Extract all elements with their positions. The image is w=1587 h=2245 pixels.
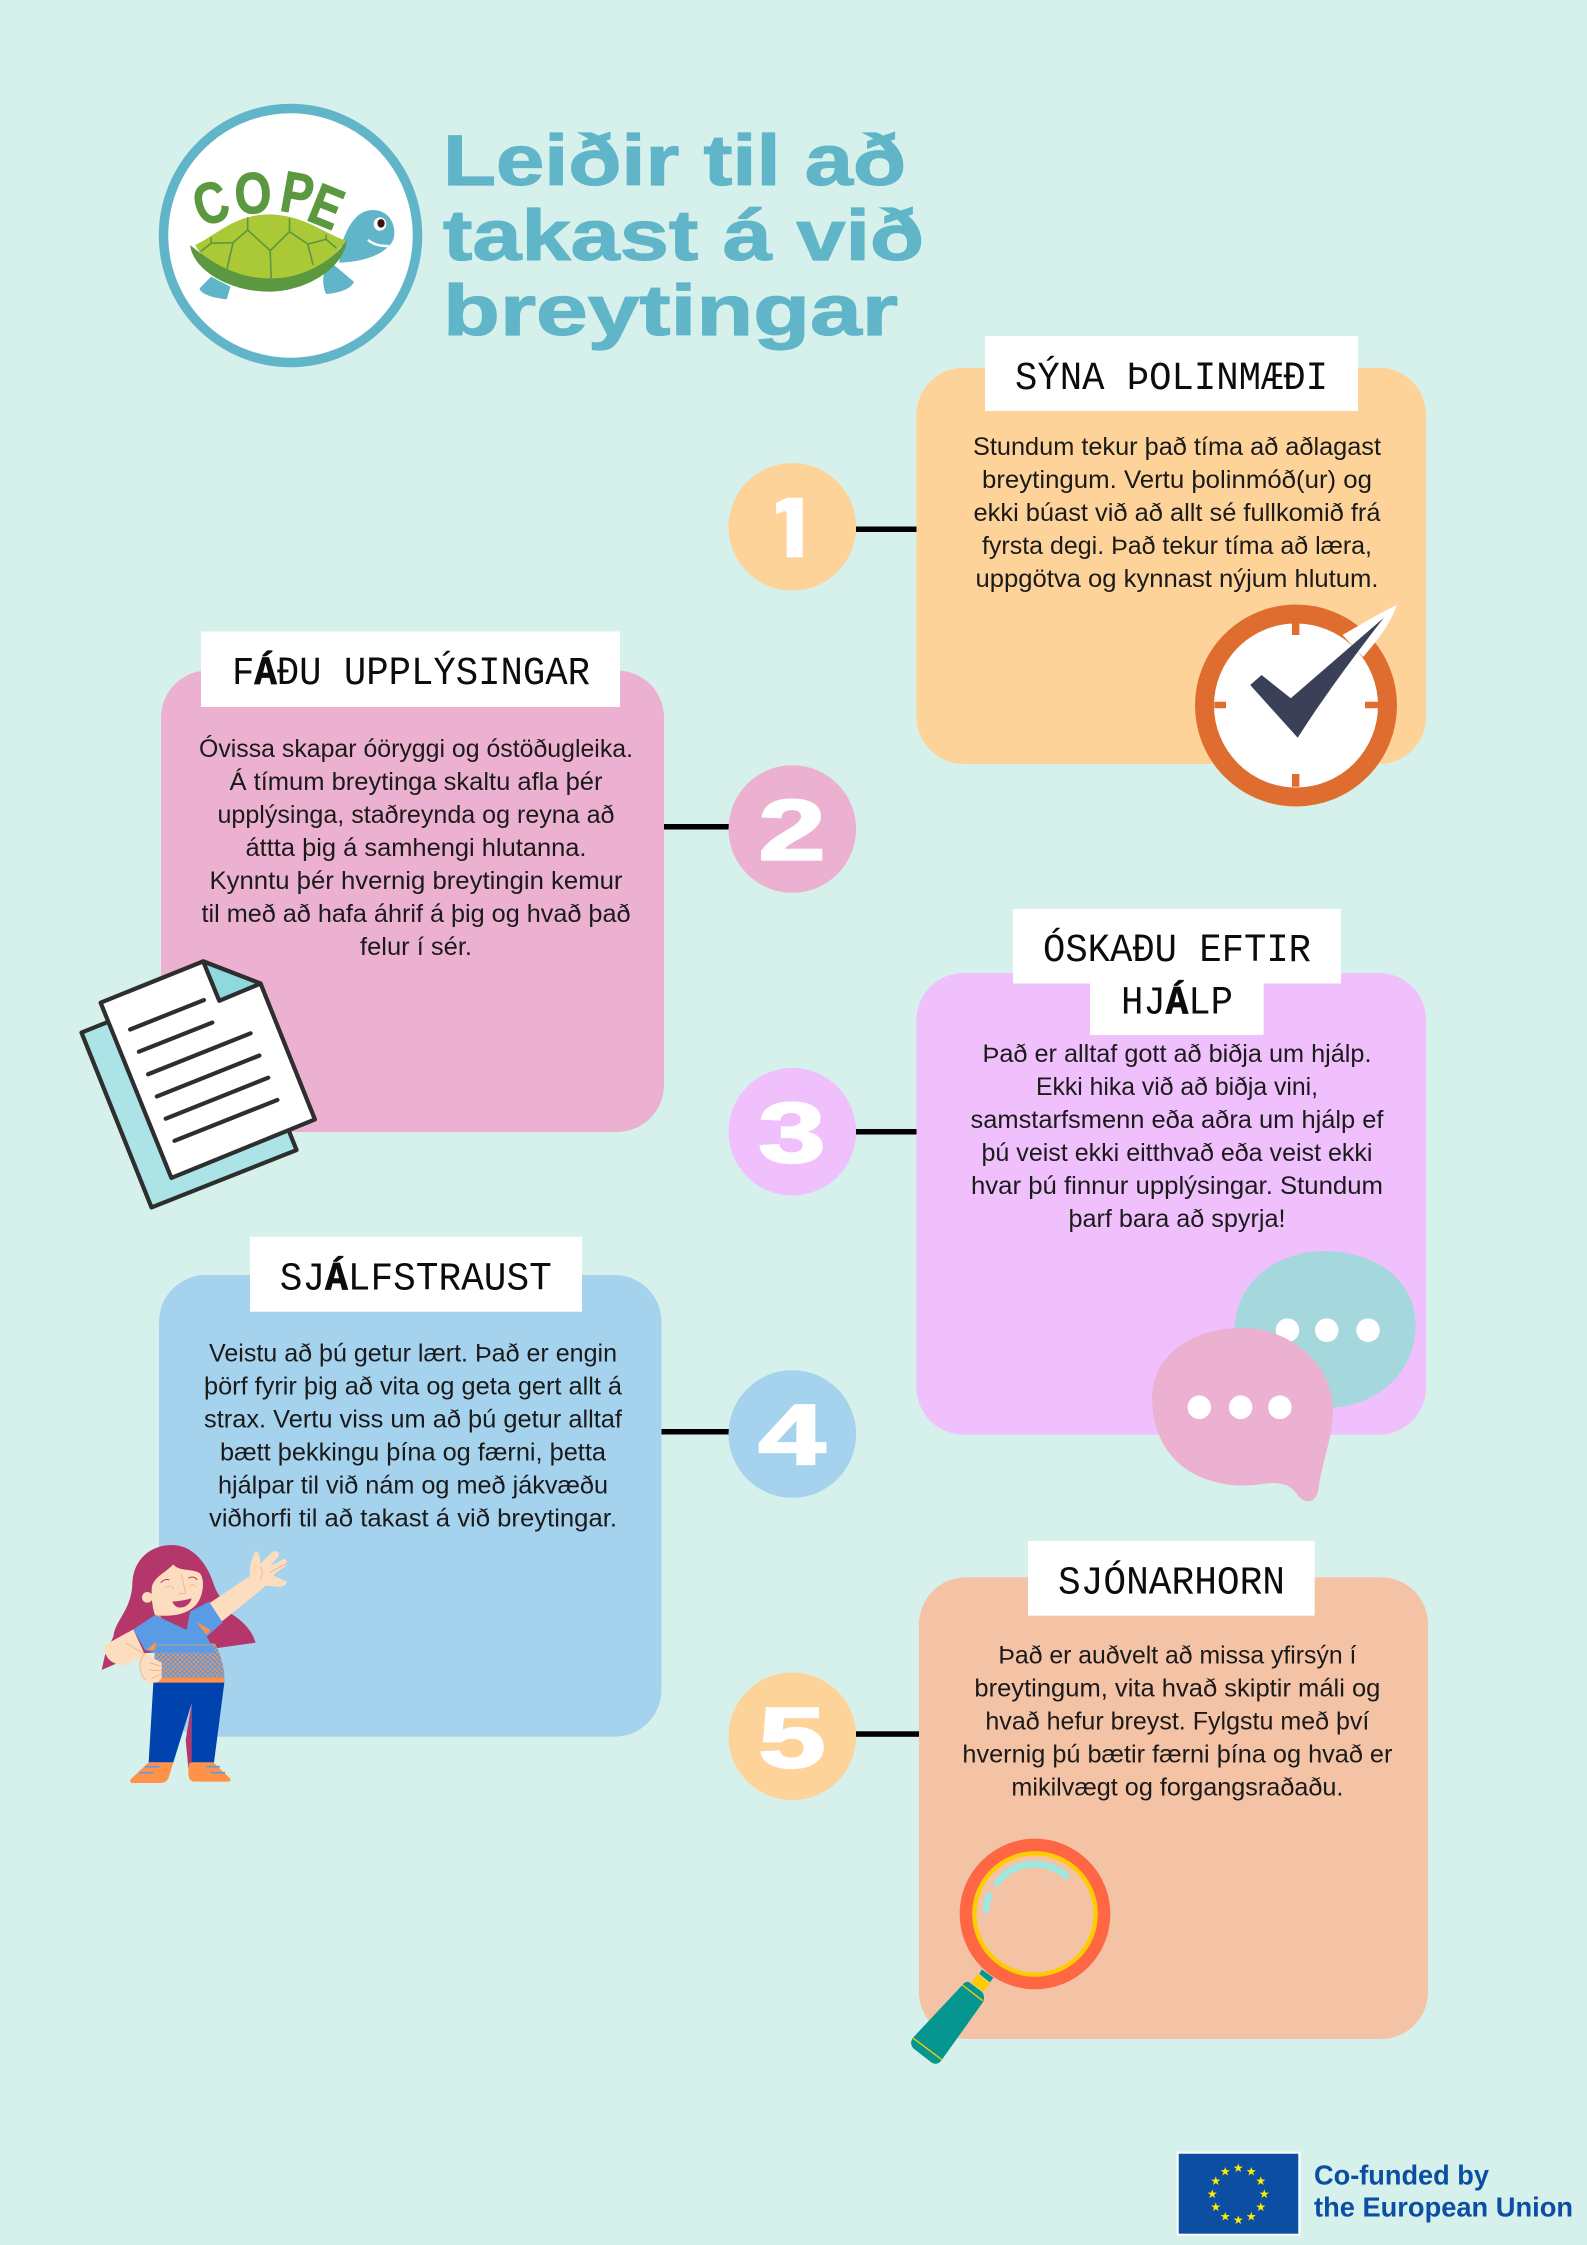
number badge 1 (728, 463, 856, 591)
footer: EU co-funded logo: ★ (1233, 2213, 1244, 2227)
icon: documents (81, 961, 315, 1207)
panel 5 text: mikilvægt og forgangsraðaðu. (1011, 1773, 1343, 1801)
title: breytingar (443, 272, 898, 351)
panel 3 text: Það er alltaf gott að biðja um hjálp. (982, 1040, 1372, 1068)
panel 2 heading: FÁÐU UPPLÝSINGAR (232, 650, 590, 697)
footer: EU co-funded logo: ★ (1220, 2164, 1231, 2178)
footer: EU co-funded logo (1177, 2152, 1573, 2236)
number badge 3 (728, 1068, 856, 1195)
footer: EU co-funded logo: ★ (1246, 2209, 1257, 2223)
footer: EU co-funded logo: ★ (1255, 2200, 1266, 2214)
logo: COPE turtle: C (185, 167, 237, 240)
icon: clock with check mark (1204, 605, 1397, 797)
panel 5 text: Það er auðvelt að missa yfirsýn í (998, 1641, 1356, 1669)
panel 5 text: breytingum, vita hvað skiptir máli og (974, 1674, 1380, 1702)
panel 1 text: uppgötva og kynnast nýjum hlutum. (976, 565, 1378, 593)
title: takast á við (443, 197, 924, 276)
logo: COPE turtle: E (300, 172, 352, 243)
panel 1 text: fyrsta degi. Það tekur tíma að læra, (982, 532, 1372, 560)
number badge 1: 1 (755, 481, 831, 576)
panel 5: sjónarhorn (911, 1541, 1428, 2064)
number badge 5 (728, 1672, 856, 1800)
number badge 4: 4 (758, 1388, 826, 1483)
icon: waving woman (102, 1545, 287, 1783)
panel 2 text: Óvissa skapar óöryggi og óstöðugleika. (199, 734, 633, 763)
panel 2 text: Á tímum breytinga skaltu afla þér (230, 767, 602, 796)
panel 1 text: ekki búast við að allt sé fullkomið frá (974, 499, 1381, 527)
panel 2: fáðu upplýsingar (81, 632, 664, 1207)
panel 3 text: samstarfsmenn eða aðra um hjálp ef (970, 1106, 1384, 1134)
footer: EU co-funded logo: ★ (1210, 2174, 1221, 2188)
number badge 3: 3 (758, 1086, 826, 1181)
number badge 5: 5 (758, 1691, 826, 1786)
connector 5 (856, 1731, 920, 1737)
panel 1 text: breytingum. Vertu þolinmóð(ur) og (982, 466, 1372, 494)
panel 2 text: Kynntu þér hvernig breytingin kemur (210, 867, 622, 895)
footer: EU co-funded logo: ★ (1233, 2161, 1244, 2175)
panel 4 text: bætt þekkingu þína og færni, þetta (220, 1439, 606, 1467)
number badge 2: 2 (758, 784, 826, 878)
footer: EU co-funded logo: ★ (1246, 2164, 1257, 2178)
footer: EU co-funded logo: ★ (1207, 2187, 1218, 2201)
panel 3 text: Ekki hika við að biðja vini, (1036, 1073, 1318, 1101)
footer: EU co-funded logo: ★ (1255, 2174, 1266, 2188)
panel 2 text: upplýsinga, staðreynda og reyna að (218, 801, 614, 829)
panel 1 text (973, 433, 1381, 593)
panel 5 text: hvað hefur breyst. Fylgstu með því (985, 1707, 1369, 1735)
panel 5 text (962, 1641, 1392, 1801)
number badge 2 (728, 765, 856, 893)
panel 1 heading: SÝNA ÞOLINMÆÐI (1015, 355, 1328, 402)
panel 4 text: strax. Vertu viss um að þú getur alltaf (204, 1406, 622, 1434)
connector 2 (662, 824, 730, 830)
footer: EU co-funded logo: Co-funded by (1314, 2159, 1489, 2190)
panel 4 text (204, 1340, 622, 1533)
connector 4 (660, 1429, 730, 1434)
panel 3 text: hvar þú finnur upplýsingar. Stundum (971, 1172, 1383, 1200)
panel 4 text: Veistu að þú getur lært. Það er engin (209, 1340, 617, 1368)
panel 3 text: þarf bara að spyrja! (1068, 1205, 1286, 1233)
panel 2 text: til með að hafa áhrif á þig og hvað það (202, 900, 630, 928)
panel 4 heading (250, 1237, 582, 1312)
panel 2 text: áttta þig á samhengi hlutanna. (246, 834, 586, 862)
panel 4 text: hjálpar til við nám og með jákvæðu (218, 1472, 608, 1500)
panel 4 text: viðhorfi til að takast á við breytingar. (209, 1505, 617, 1533)
panel 1 text: Stundum tekur það tíma að aðlagast (973, 433, 1381, 461)
connector 3 (856, 1129, 918, 1134)
panel 4 text: þörf fyrir þig að vita og geta gert allt á (204, 1373, 622, 1401)
connector 1 (856, 526, 918, 532)
logo: COPE turtle (164, 108, 418, 362)
number badge 4 (728, 1370, 856, 1498)
logo: COPE turtle: P (276, 160, 319, 229)
panel 5 heading (1028, 1541, 1315, 1616)
logo: COPE turtle: O (233, 161, 273, 227)
panel 3: óskaðu eftir hjálp (916, 909, 1426, 1501)
panel 3 heading (1013, 909, 1341, 1035)
icon: speech bubbles (1152, 1251, 1416, 1501)
footer: EU co-funded logo: the European Union (1314, 2192, 1573, 2223)
panel 4: sjálfstraust (102, 1237, 661, 1783)
panel 1 heading (985, 336, 1358, 411)
footer: EU co-funded logo: ★ (1259, 2187, 1270, 2201)
footer: EU co-funded logo: ★ (1220, 2209, 1231, 2223)
panel 3 text: þú veist ekki eitthvað eða veist ekki (982, 1139, 1372, 1167)
panel 5 text: hvernig þú bætir færni þína og hvað er (962, 1740, 1392, 1768)
panel 1: sýna þolinmæði (916, 336, 1426, 797)
panel 4 heading: SJÁLFSTRAUST (280, 1255, 552, 1302)
title (443, 122, 924, 351)
icon: magnifying glass (911, 1845, 1104, 2064)
panel 5 heading: SJÓNARHORN (1058, 1558, 1285, 1606)
panel 3 heading: ÓSKAÐU EFTIR (1043, 926, 1311, 974)
panel 3 text (970, 1040, 1384, 1233)
panel 2 text: felur í sér. (360, 933, 472, 961)
panel 2 text (199, 734, 633, 961)
panel 2 heading (201, 632, 620, 707)
panel 3 heading: HJÁLP (1121, 980, 1233, 1026)
title: Leiðir til að (443, 122, 906, 201)
footer: EU co-funded logo: ★ (1210, 2200, 1221, 2214)
